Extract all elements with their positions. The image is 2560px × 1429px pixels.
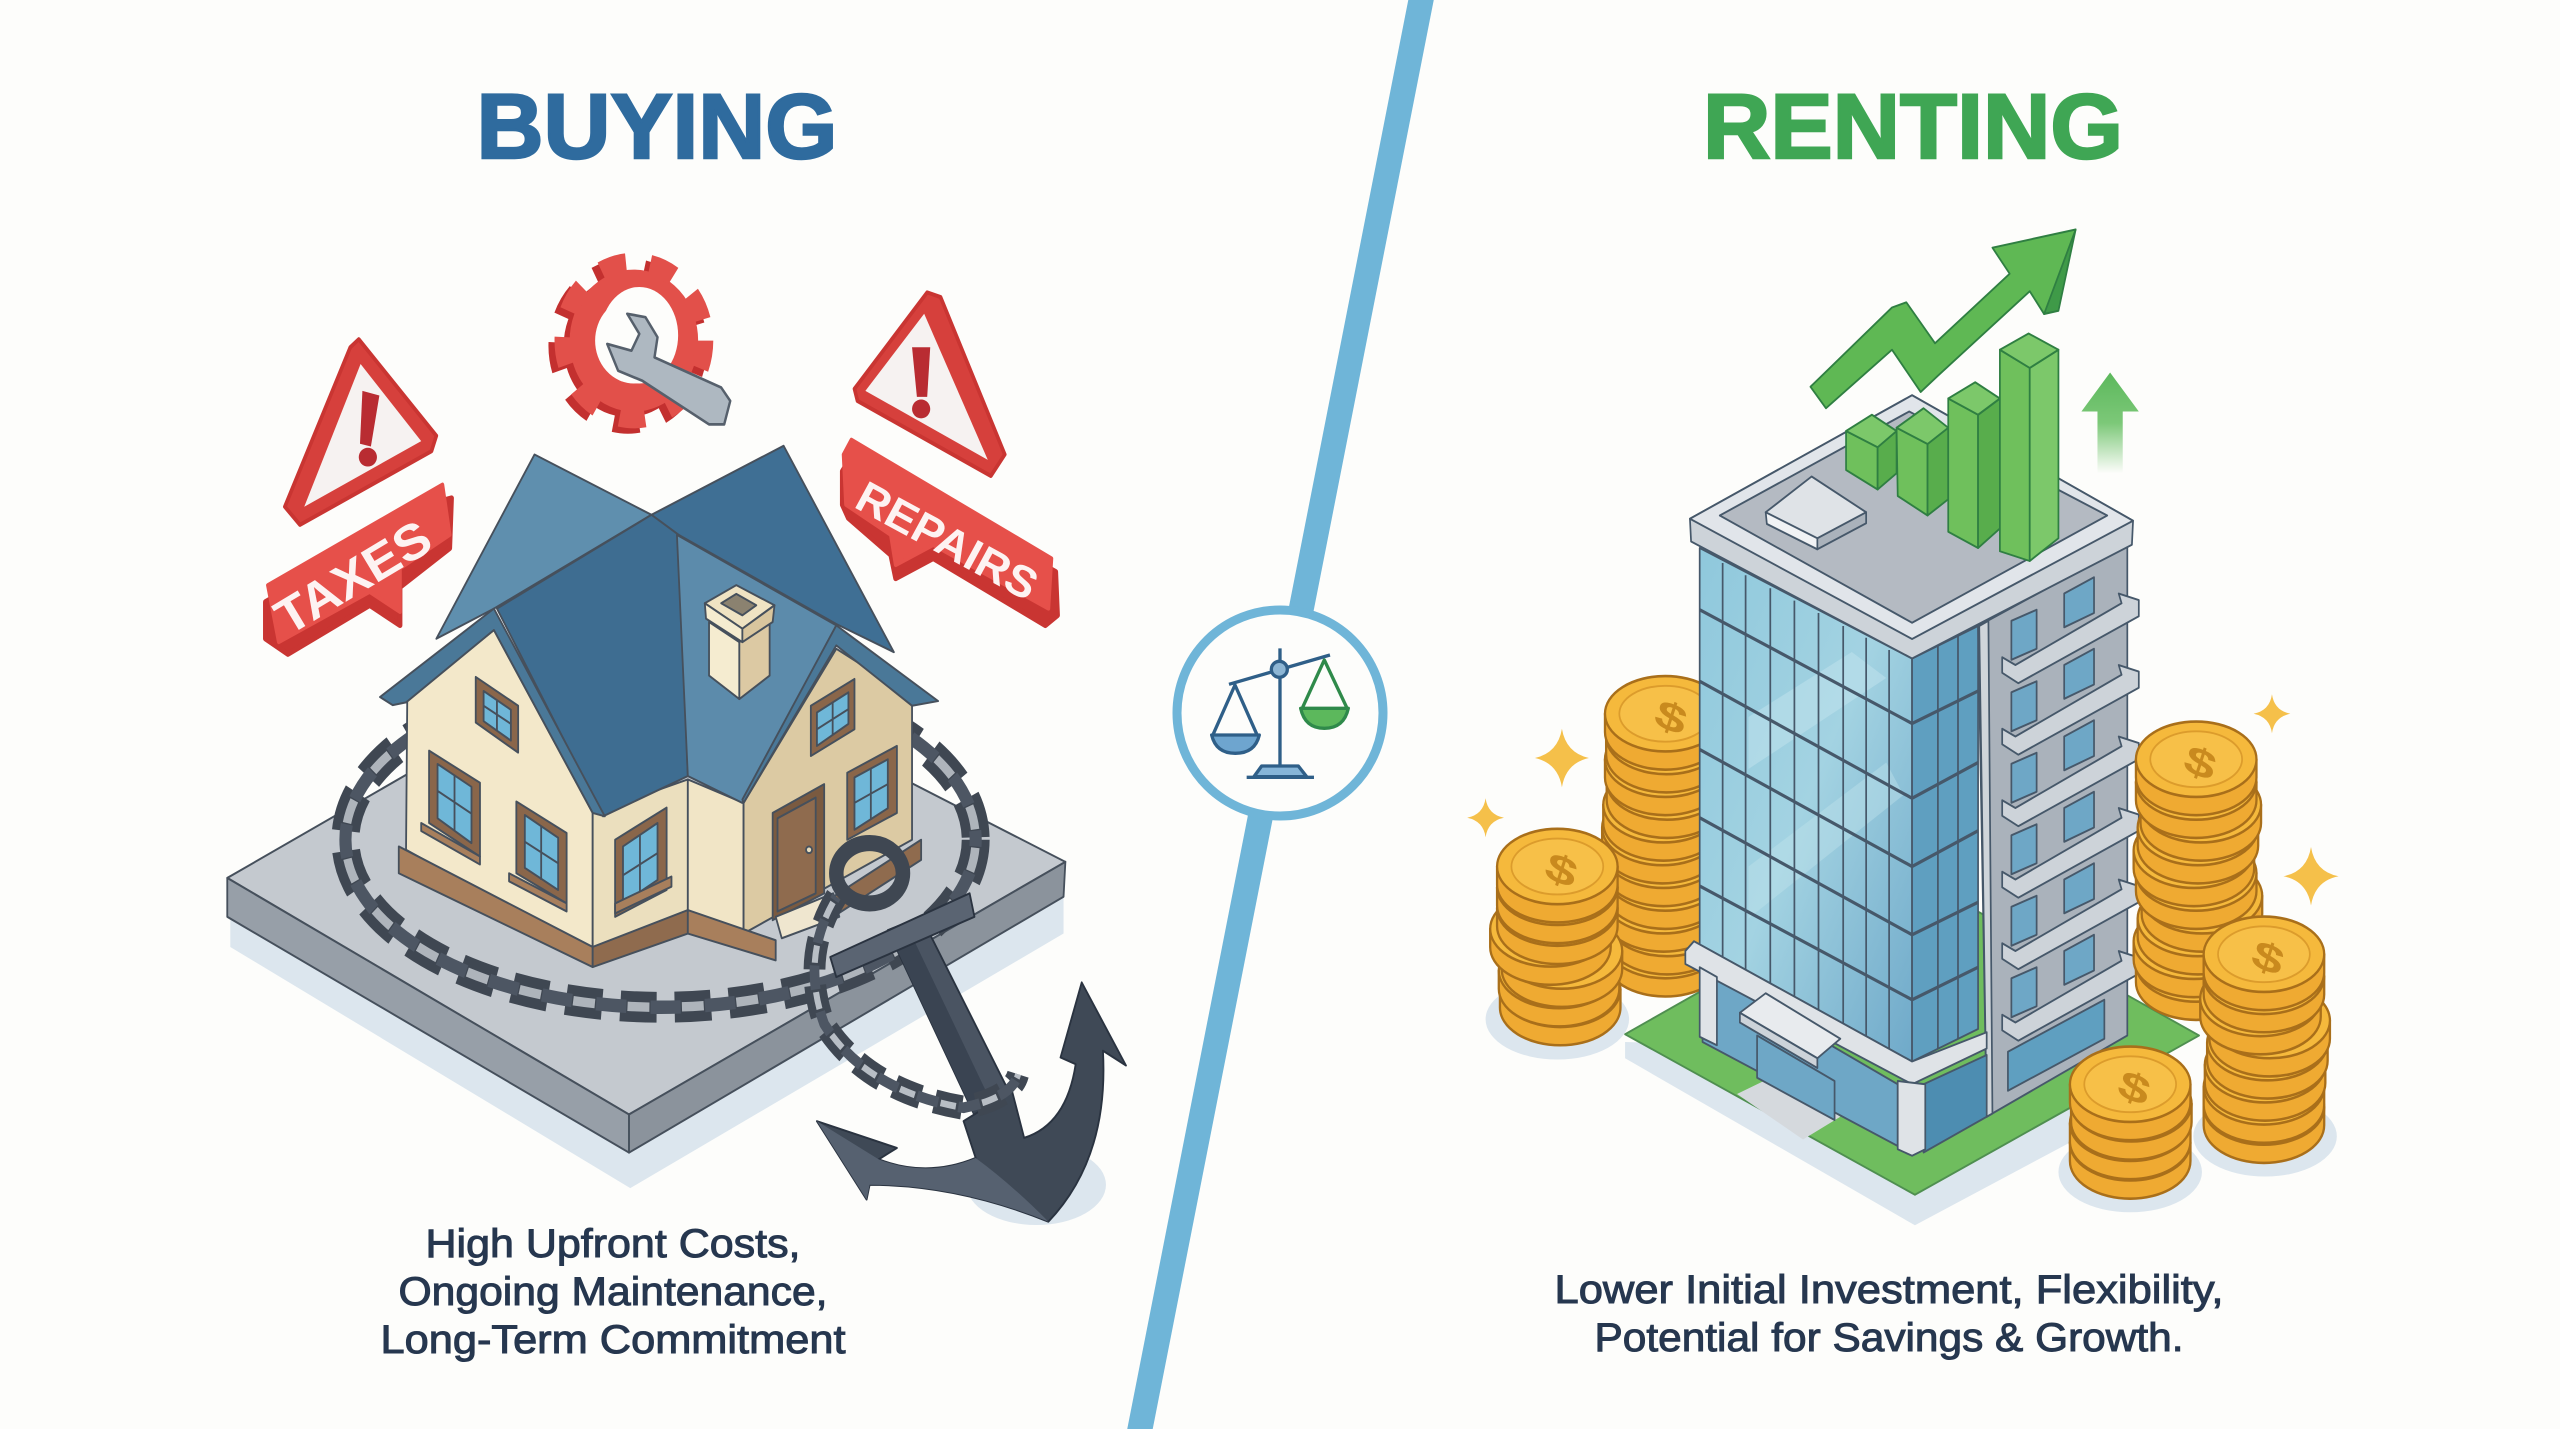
- label: repairs: REPAIRS: [848, 472, 1046, 610]
- caption: buying: [380, 1222, 846, 1362]
- caption: buying: Ongoing Maintenance,: [398, 1270, 828, 1314]
- caption: renting: Potential for Savings & Growth.: [1594, 1316, 2184, 1360]
- panel: renting illustration: [1467, 230, 2339, 1225]
- coin stack: right front: [2193, 917, 2337, 1177]
- anchor chain: [814, 897, 1018, 1108]
- icon: warning triangle right: [854, 292, 1005, 476]
- sparkles: [1467, 694, 2339, 906]
- coin stack: right back: $: [2179, 736, 2222, 790]
- callout shape: repairs: [842, 440, 1057, 625]
- title: renting: RENTING: [1703, 76, 2123, 178]
- building: [1685, 395, 2139, 1156]
- callout shape: taxes: [265, 485, 451, 654]
- green lawn with shadow: [1625, 873, 2199, 1225]
- concrete side wall: [1978, 545, 2127, 1117]
- caption: renting: [1554, 1268, 2224, 1360]
- small up arrow: [2081, 372, 2139, 473]
- coin stack: centre front: $: [2113, 1061, 2156, 1115]
- panel: buying illustration: [227, 263, 1126, 1225]
- coin stack: right back: [2134, 722, 2262, 1020]
- caption: renting: Lower Initial Investment, Flexibility,: [1554, 1268, 2224, 1312]
- ground floor with entrance: [1685, 941, 1987, 1156]
- house: [380, 446, 938, 967]
- label: taxes: TAXES: [265, 509, 441, 646]
- caption: buying: High Upfront Costs,: [426, 1222, 800, 1266]
- house roof: [380, 446, 938, 816]
- green bar chart: [1846, 334, 2058, 561]
- coin stack: back left: $: [1649, 691, 1692, 744]
- chimney: [705, 585, 774, 699]
- balconies: [2002, 577, 2139, 1041]
- coin stack: back left: [1602, 676, 1727, 997]
- house windows: [421, 677, 897, 917]
- coin stack: left front: [1486, 829, 1629, 1060]
- diagonal divider line: [1139, 0, 1422, 1429]
- icon: balance scale in circle: [1177, 610, 1383, 816]
- chain around house: [345, 672, 976, 1007]
- coin stack: right front: $: [2246, 931, 2289, 985]
- growth arrow: [1810, 230, 2076, 408]
- icon: wrench: [607, 314, 730, 424]
- coin stack: left front: $: [1540, 843, 1583, 897]
- icon: gear: [558, 263, 704, 424]
- icon: warning triangle left: [285, 339, 436, 525]
- roof: [1690, 395, 2133, 658]
- anchor: [817, 843, 1126, 1225]
- coin stack: centre front: [2058, 1047, 2202, 1212]
- caption: buying: Long-Term Commitment: [380, 1318, 846, 1362]
- title: buying: BUYING: [476, 76, 838, 178]
- front door: [773, 784, 839, 938]
- concrete slab with shadow: [227, 642, 1065, 1188]
- glass facade: [1700, 548, 1978, 1062]
- house walls: [399, 630, 921, 967]
- scale drawing: [1212, 648, 1348, 777]
